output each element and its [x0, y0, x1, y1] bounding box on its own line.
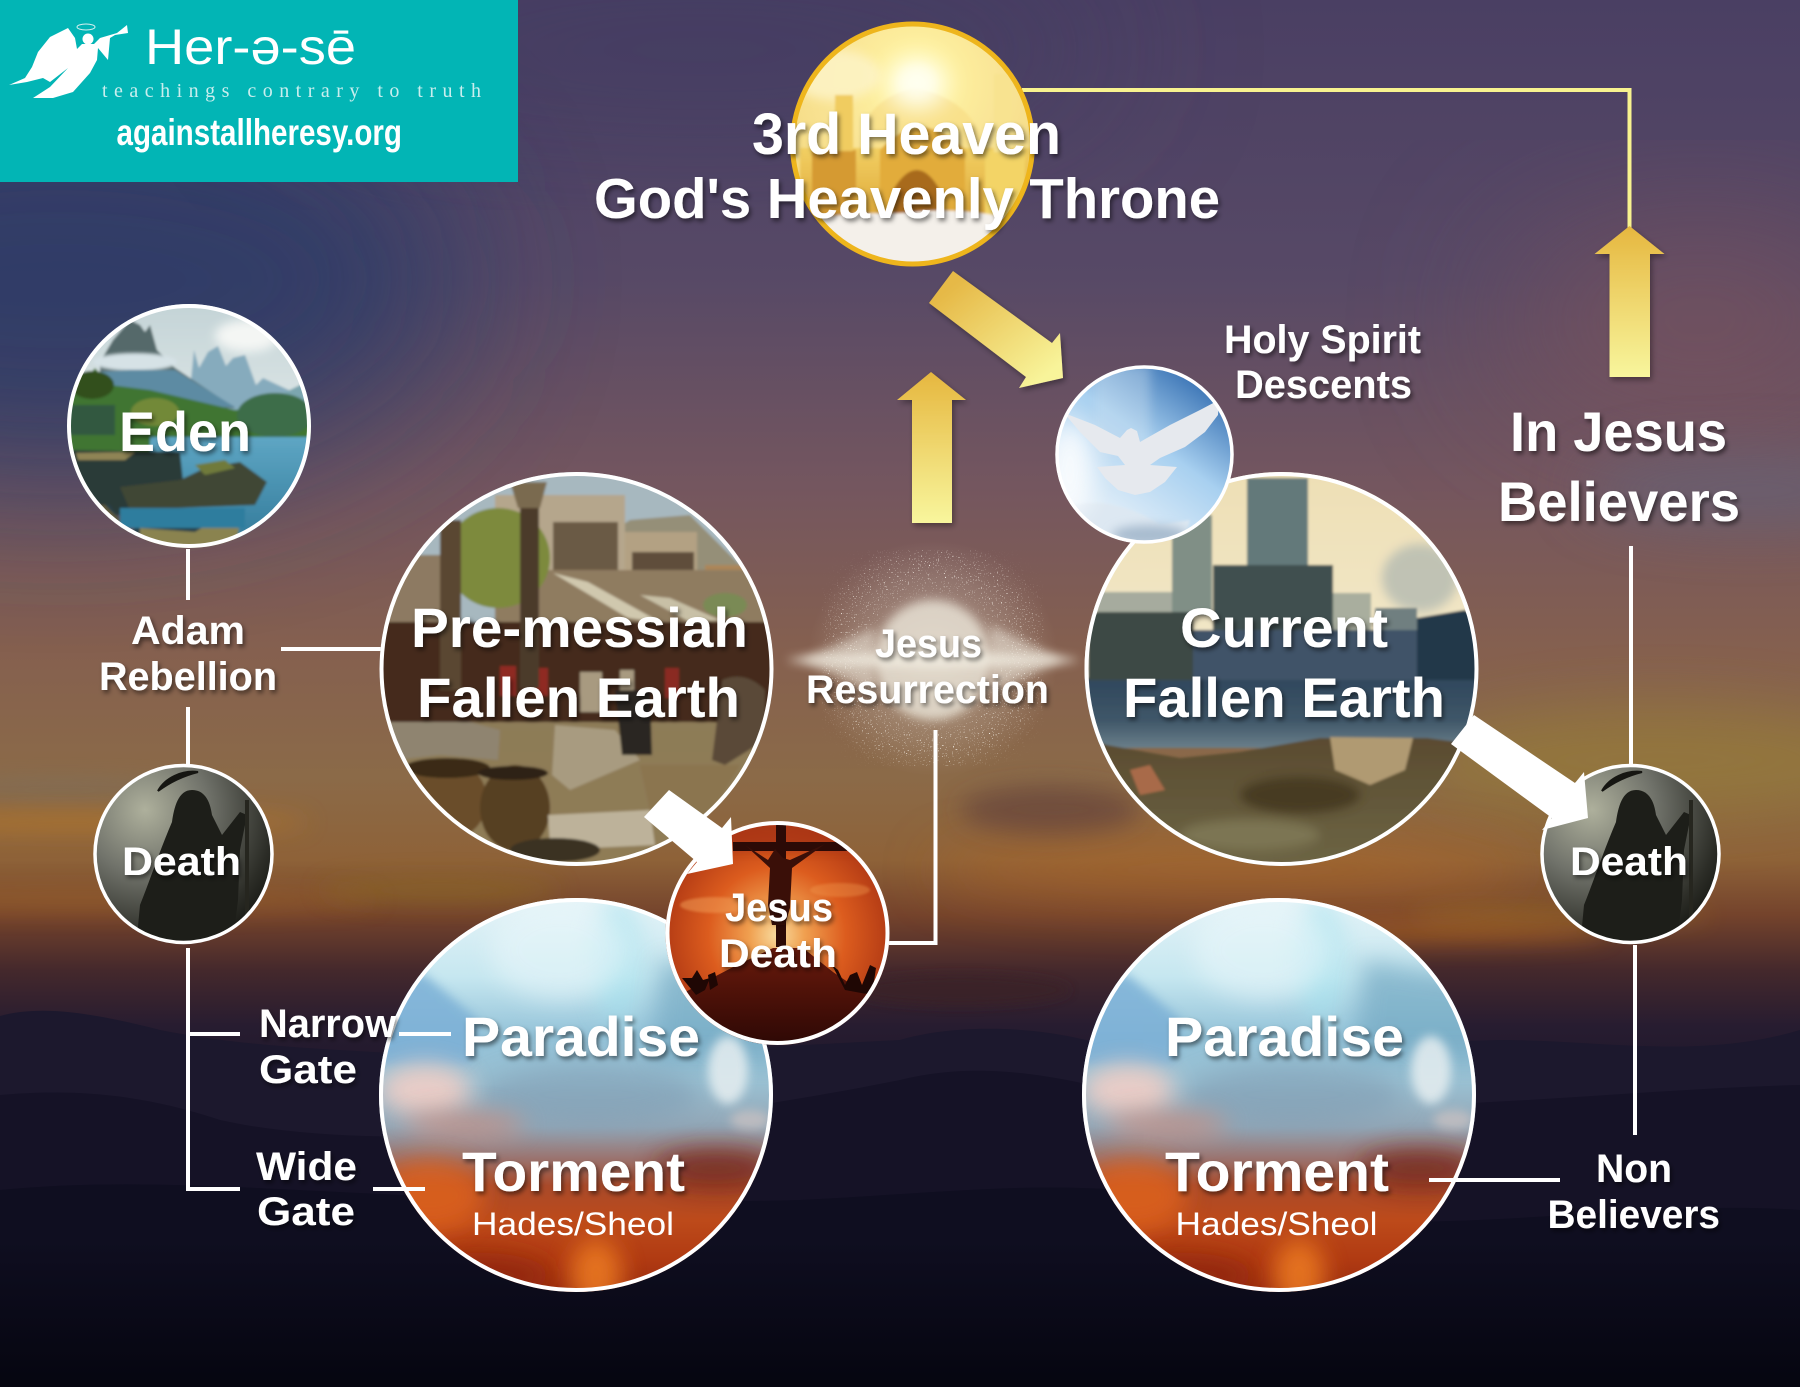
label: Wide Gate: Wide — [256, 1145, 357, 1189]
icon: white dove — [1064, 400, 1219, 495]
label: Adam Rebellion: Adam — [131, 609, 245, 653]
label: Jesus Death: Death — [719, 932, 837, 976]
label: 3rd Heaven God's Heavenly Throne: 3rd Heaven — [752, 102, 1061, 167]
circle: 3rd Heaven — [790, 23, 1035, 265]
label: Narrow Gate: Gate — [259, 1048, 357, 1092]
label: Current Fallen Earth: Fallen Earth — [1123, 666, 1445, 729]
label: 3rd Heaven God's Heavenly Throne — [594, 102, 1220, 231]
circle: Current Fallen Earth — [1080, 465, 1485, 875]
connector: heaven to In Jesus Believers — [1022, 90, 1630, 228]
label: Jesus Death: Jesus — [725, 886, 833, 930]
label: Non Believers: Believers — [1548, 1193, 1720, 1237]
label: Wide Gate: Gate — [257, 1190, 355, 1234]
glow: Jesus Resurrection — [788, 540, 1078, 776]
logo website: againstallheresy.org — [116, 112, 402, 153]
label: Narrow Gate — [259, 1002, 397, 1092]
arrow: believers up to heaven — [1594, 226, 1664, 377]
icon: trumpeting angel — [9, 24, 128, 98]
label: Pre-messiah Fallen Earth: Fallen Earth — [417, 666, 740, 729]
circle: Pre-messiah Fallen Earth — [375, 465, 780, 875]
circle: Eden — [67, 304, 311, 548]
label: Narrow Gate: Narrow — [259, 1002, 397, 1046]
label: In Jesus Believers: In Jesus — [1510, 400, 1727, 463]
logo tagline: teachings contrary to truth — [102, 80, 481, 102]
label: 3rd Heaven God's Heavenly Throne: God's Heavenly Throne — [594, 167, 1220, 231]
label: Non Believers: Non — [1596, 1147, 1672, 1191]
logo wordmark: Her-ə-sē — [145, 19, 356, 75]
circle: Jesus Death — [660, 820, 895, 1050]
arrow: Pre-messiah to Jesus Death — [644, 790, 733, 874]
logo panel — [0, 0, 518, 182]
label: Hades/Sheol: Hades/Sheol — [472, 1206, 674, 1242]
label: In Jesus Believers — [1498, 400, 1740, 533]
label: Paradise: Paradise — [462, 1005, 700, 1068]
label: Jesus Death — [719, 886, 837, 976]
connector: Adam Rebellion to Pre-messiah — [281, 647, 381, 651]
label: Current Fallen Earth: Current — [1180, 596, 1388, 659]
circle: left Paradise and Torment — [375, 898, 790, 1311]
label: In Jesus Believers: Believers — [1498, 470, 1740, 533]
connector: Death to Non Believers — [1633, 945, 1637, 1135]
arrow: Current Fallen Earth to Death — [1451, 715, 1588, 830]
connector: Wide Gate to Torment — [373, 1187, 425, 1191]
icon: cross — [733, 825, 847, 947]
connector: Narrow Gate to Paradise — [399, 1032, 451, 1036]
label: Death: Death — [1570, 840, 1688, 884]
label: Torment: Torment — [462, 1140, 685, 1203]
label: Pre-messiah Fallen Earth — [411, 596, 748, 729]
circle: left Death — [94, 764, 274, 948]
label: Holy Spirit Descents: Holy Spirit — [1224, 318, 1421, 362]
connector: Eden to Adam Rebellion — [186, 549, 190, 600]
circle: right Paradise and Torment — [1078, 898, 1493, 1311]
connector: Jesus Death to Resurrection — [885, 730, 936, 943]
label: Pre-messiah Fallen Earth: Pre-messiah — [411, 596, 748, 659]
label: Adam Rebellion — [99, 609, 277, 699]
label: Adam Rebellion: Rebellion — [99, 655, 277, 699]
circle: right Death — [1540, 764, 1720, 948]
label: Eden: Eden — [119, 400, 251, 463]
label: Torment: Torment — [1165, 1140, 1389, 1203]
label: Jesus Resurrection — [806, 622, 1049, 712]
arrow: resurrection up to heaven — [897, 372, 966, 523]
label: Death: Death — [122, 840, 241, 884]
connector: Adam Rebellion to Death — [186, 707, 190, 765]
connector: Believers to Death — [1629, 546, 1633, 765]
connector: Torment to Non Believers — [1429, 1178, 1560, 1182]
label: Wide Gate — [256, 1145, 357, 1234]
label: Non Believers — [1548, 1147, 1720, 1237]
label: Current Fallen Earth — [1123, 596, 1445, 729]
label: Holy Spirit Descents: Descents — [1235, 363, 1412, 407]
label: Jesus Resurrection: Resurrection — [806, 668, 1049, 712]
circle: Holy Spirit dove — [1048, 365, 1234, 550]
label: Jesus Resurrection: Jesus — [875, 622, 982, 666]
arrow: heaven to Holy Spirit — [929, 271, 1063, 388]
label: Hades/Sheol: Hades/Sheol — [1176, 1206, 1378, 1242]
label: Paradise: Paradise — [1165, 1005, 1404, 1068]
label: Holy Spirit Descents — [1224, 318, 1421, 407]
connector: Death to gates — [188, 948, 240, 1189]
